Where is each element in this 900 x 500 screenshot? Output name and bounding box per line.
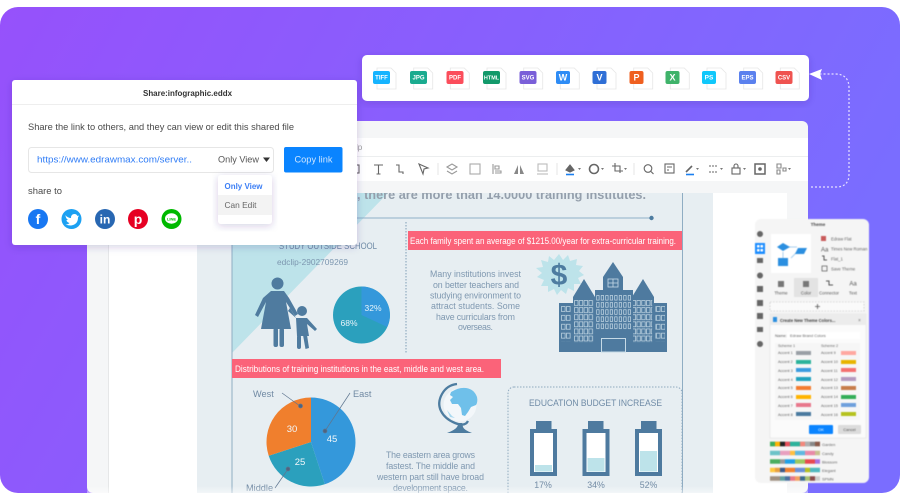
icon: PS [702, 71, 716, 84]
scheme 2 swatches: Accent 15 [821, 404, 838, 408]
icon: pinterest: p [134, 211, 142, 227]
palette list: Candy [822, 451, 834, 456]
panel: export formats [362, 55, 809, 101]
icon: facebook: f [36, 211, 41, 227]
paragraph: institutions: on better teachers and [433, 280, 519, 290]
icon: PowerPoint [630, 71, 644, 84]
paragraph: institutions: Many institutions invest [430, 269, 522, 279]
scheme 2 swatches: Accent 12 [821, 378, 838, 382]
icon: school building [559, 262, 667, 352]
toolbar icons [350, 163, 786, 174]
add theme box [770, 302, 864, 311]
icon: Excel [666, 71, 680, 84]
icon: PDF: PDF [449, 76, 461, 82]
banner: distributions [232, 359, 501, 378]
theme options: Aa [821, 248, 829, 254]
battery 34%: 34% [587, 480, 605, 490]
scheme 2 swatches: Scheme 2 [821, 344, 838, 348]
icon: SVG [520, 71, 536, 84]
icon: TIFF [373, 71, 390, 84]
icon: facebook [28, 209, 48, 229]
create theme colors dialog: Edraw Brand Colors [790, 333, 826, 338]
band clipping the headline top [197, 181, 713, 193]
scheme 2 swatches: Accent 10 [821, 360, 838, 364]
create theme colors dialog [770, 314, 866, 438]
icon: JPG: JPG [412, 76, 425, 82]
icon: JPG [410, 71, 427, 84]
scheme 2 swatches: Accent 9 [821, 351, 836, 355]
banner: distributions: Distributions of training institutions in the east, middle and west area. [235, 364, 484, 375]
scheme 1 swatches: Accent 7 [778, 404, 793, 408]
theme options: Times New Roman [831, 246, 868, 252]
icon: line [162, 209, 182, 229]
theme options: Save Theme [831, 266, 856, 272]
paragraph: institutions: studying environment to [430, 290, 521, 300]
create theme colors dialog: Name: [775, 333, 787, 338]
create theme colors dialog: Create New Theme Colors... [780, 318, 835, 323]
icon: HTML: HTML [484, 76, 500, 82]
theme tabs: Connector [819, 290, 839, 296]
sidebar tool strip [755, 231, 765, 347]
theme tabs: Color [801, 290, 812, 296]
battery 17%: 17% [534, 480, 552, 490]
theme title: Theme [811, 222, 826, 227]
scheme 1 swatches: Scheme 1 [778, 344, 795, 348]
scheme 1 swatches: Accent 3 [778, 369, 793, 373]
budget heading: EDUCATION BUDGET INCREASE [529, 398, 662, 408]
pie chart: 32 / 68: 68% [340, 318, 358, 328]
theme tabs: Text [849, 290, 858, 296]
file icons [373, 68, 799, 89]
slice values: 30 [287, 424, 297, 435]
icon: line: LINE [167, 216, 176, 222]
toolbar dropdown carets [578, 168, 791, 170]
icon: dollar badge [536, 254, 584, 295]
instruction text: Share the link to others, and they can view or edit this shared file [28, 122, 294, 132]
region labels: East [353, 389, 372, 399]
paragraph: eastern area: development space. [393, 483, 468, 493]
teal triangle [232, 193, 388, 353]
panel: share dialog [12, 80, 357, 245]
arrow: dotted return to export bar [809, 69, 849, 187]
region labels: West [253, 389, 274, 399]
banner: family spend [408, 231, 682, 250]
scheme 2 swatches: Accent 13 [821, 386, 838, 390]
icon: twitter [62, 209, 82, 229]
dotted divider [405, 222, 407, 353]
region labels: Middle [246, 483, 273, 493]
infographic headline: , there are more than 14.0000 training institutes. [357, 188, 646, 202]
scheme 1 swatches: Accent 6 [778, 395, 793, 399]
paragraph: eastern area: fastest. The middle and [386, 461, 475, 471]
dropdown menu: Only View [224, 181, 263, 191]
OK button: OK [818, 427, 824, 432]
panel: editor window [87, 121, 808, 493]
scheme 1 swatches [778, 344, 811, 417]
paragraph: institutions: have curriculars from [436, 312, 515, 322]
dialog title: Share:infographic.eddx [143, 88, 232, 98]
icon: EPS: EPS [741, 76, 754, 82]
slice values: 25 [295, 457, 305, 468]
icon: PowerPoint: P [633, 72, 640, 82]
palette list: Elegant [822, 468, 836, 473]
slice values: 45 [327, 434, 337, 445]
paragraph: eastern area: western part still have broad [376, 472, 484, 482]
pie chart: 32 / 68 [333, 286, 390, 344]
theme tabs [774, 278, 858, 297]
leader lines [275, 393, 350, 488]
scheme 2 swatches [821, 344, 856, 417]
scheme 2 swatches: Accent 14 [821, 395, 838, 399]
icon: linkedin: in [100, 212, 110, 226]
slice values [287, 424, 337, 468]
theme options: Flat_1 [831, 256, 844, 262]
link field: Only View [218, 154, 259, 164]
scheme 2 swatches: Accent 11 [821, 369, 838, 373]
icon: dollar badge: $ [551, 259, 568, 292]
palette list: Garden [822, 442, 835, 447]
scheme 1 swatches: Accent 4 [778, 378, 793, 382]
copy link button [284, 147, 342, 172]
theme options: Edraw Flat [831, 236, 852, 242]
palette list: SPMN [822, 476, 834, 482]
theme tabs: Theme [774, 290, 788, 296]
icon: CSV [776, 71, 792, 84]
dropdown menu: Can Edit [224, 200, 257, 210]
theme options [821, 236, 868, 272]
paragraph: institutions: attract students. Some [431, 301, 520, 311]
icon: Excel: X [669, 72, 676, 82]
toolbar separators [438, 163, 634, 175]
create theme colors dialog: × [858, 318, 861, 324]
cover below window [0, 493, 900, 500]
theme preview [771, 234, 811, 273]
battery 52% [635, 421, 662, 490]
panel: education budget [508, 387, 682, 500]
icon: HTML [483, 71, 500, 84]
region labels [246, 389, 372, 493]
icon: Word [556, 71, 570, 84]
icon: TIFF: TIFF [375, 76, 388, 82]
icon: globe [439, 384, 477, 433]
palette list: Blossom [822, 460, 838, 464]
panel: theme sidebar [755, 219, 869, 483]
link field: https://www.edrawmax.com/server.. [37, 154, 192, 164]
icon: CSV: CSV [778, 76, 790, 82]
pie chart: regional distribution [246, 389, 372, 493]
scheme 1 swatches: Accent 1 [778, 351, 793, 355]
icon: linkedin [95, 209, 115, 229]
pie chart: 32 / 68: 32% [364, 303, 382, 313]
title divider [12, 104, 357, 106]
icon: SVG: SVG [522, 76, 535, 82]
paragraph: eastern area: The eastern area grows [386, 450, 476, 460]
share to label: share to [28, 186, 62, 196]
icon: Word: W [559, 72, 568, 82]
paragraph: eastern area [376, 450, 484, 493]
icon: EPS [739, 71, 756, 84]
scheme 2 swatches: Accent 16 [821, 413, 838, 417]
battery 17% [530, 421, 557, 490]
cancel button: Cancel [843, 427, 856, 432]
palette list [770, 442, 838, 482]
icon: PS: PS [705, 74, 714, 82]
banner: family spend: Each family spent an average of $1215.00/year for extra-curricular training. [410, 236, 676, 247]
window bottom fade [87, 486, 808, 493]
icon: PDF [446, 71, 464, 84]
scheme 1 swatches: Accent 8 [778, 413, 793, 417]
theme tabs: Aa [849, 282, 857, 288]
timeline rule [232, 216, 654, 220]
study heading: STUDY OUTSIDE SCHOOL [279, 241, 377, 251]
icon: pinterest [128, 209, 148, 229]
window title fragment: lp [356, 143, 363, 152]
battery 34% [582, 421, 610, 490]
link field [28, 148, 274, 172]
battery 52%: 52% [640, 480, 657, 490]
paragraph: institutions: overseas. [458, 322, 493, 332]
icon: Visio [592, 71, 606, 84]
icon: mother and child [255, 278, 317, 349]
scheme 1 swatches: Accent 2 [778, 360, 793, 364]
dropdown menu [218, 175, 272, 224]
page frame lines [232, 193, 682, 493]
icon: Visio: V [596, 72, 603, 82]
clip id text: edclip-2902709269 [277, 257, 348, 267]
scheme 1 swatches: Accent 5 [778, 386, 793, 390]
copy link button: Copy link [294, 154, 333, 164]
paragraph: institutions [430, 269, 522, 332]
panel: infographic page [197, 181, 713, 500]
